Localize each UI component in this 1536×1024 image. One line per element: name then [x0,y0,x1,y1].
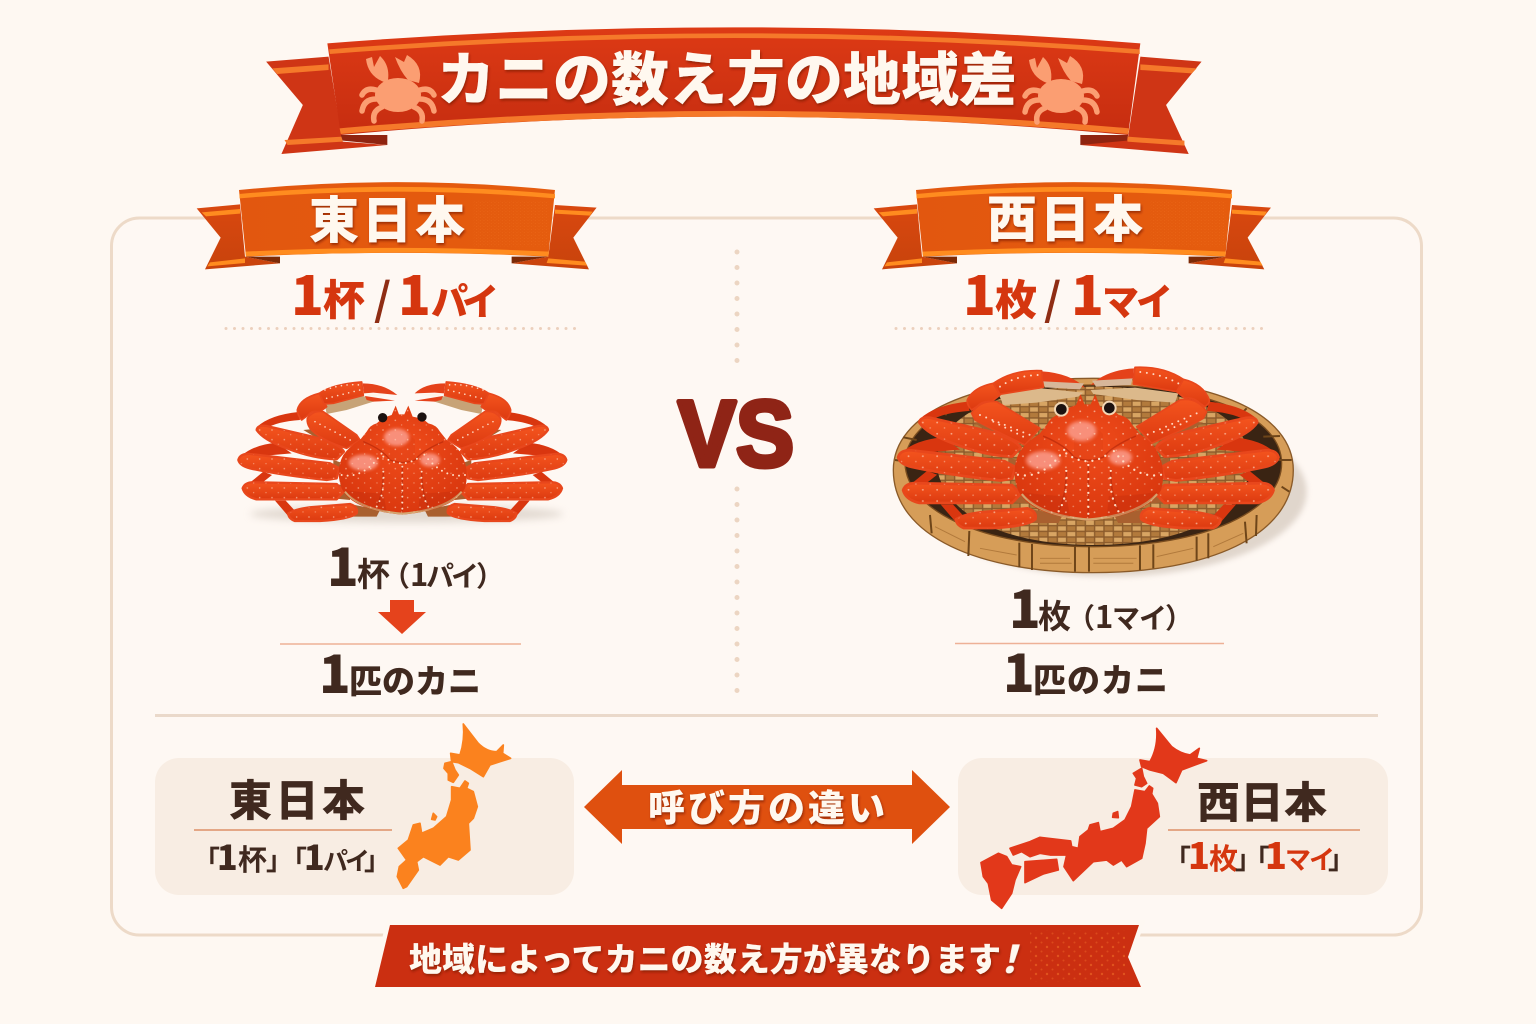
subtitle: east: イ [462,272,499,326]
eyes [378,412,427,422]
subtitle: east: 1 [291,252,324,331]
label: 1 hai: （ [382,555,410,595]
wording: 「 [1164,838,1191,877]
label: one crab: カ [415,655,448,703]
subtitle: west: 1 [1071,252,1104,331]
wording: 「 [1243,838,1270,877]
main panel frame [112,218,1422,935]
label: 1 mai: 枚 [1038,590,1071,638]
crab: east [238,382,566,523]
subtitle: east: 1 [398,252,431,331]
label: one crab: ニ [1135,654,1168,702]
wording: 」 [266,839,293,878]
ribbon: east [197,181,597,269]
wording: 1 [217,831,238,880]
wording: 「 [193,839,220,878]
VS mark: VS [678,381,794,486]
label: 1 mai: イ [1139,597,1167,637]
map: east [397,724,511,888]
banner text: 地域によってカニの数え方が異なります [409,933,1001,981]
title text: カニの数え方の地域差 [437,33,1017,117]
subtitle: west: 枚 [995,267,1037,328]
subtitle: west: イ [1136,272,1173,326]
arrow label: 呼び方の違い [648,778,885,832]
double arrow: difference in naming [584,770,950,844]
heading: west: 西日本 [987,180,1143,252]
claw right [415,382,511,448]
heading: east: 東日本 [309,181,465,253]
wording: 「 [280,839,307,878]
subtitle: east: パ [431,272,468,326]
basket [893,378,1293,573]
label: one crab: 匹 [349,655,382,703]
wording: 」 [1328,838,1355,877]
panel: west summary [958,728,1388,908]
ribbon: west [874,180,1271,269]
label: 1 hai: イ [451,555,479,595]
exclamation: ！ [987,930,1039,985]
wording: 」 [364,839,391,878]
subtitle: west: / [1044,264,1061,328]
arrow down [378,600,426,634]
caption: east [280,526,521,708]
label: one crab: 1 [319,633,351,708]
label: 1 mai: 1 [1095,592,1113,637]
wording: マ [1285,840,1311,877]
claw left [297,382,397,448]
map: west [981,728,1207,908]
label: 1 mai: マ [1112,597,1140,637]
wording: パ [323,842,348,878]
wording: イ [1309,840,1335,877]
subtitle: east: / [374,264,391,328]
bottom banner [375,925,1141,987]
caption: west [955,568,1224,707]
wording: 1 [1188,828,1210,880]
subtitle: west: 1 [963,252,996,331]
label: 1 mai: 1 [1009,568,1041,643]
subtitle: west: マ [1102,272,1139,326]
wording: 1 [304,831,325,880]
heading: 東日本 [229,767,365,829]
label: one crab: 匹 [1033,654,1066,702]
wording: 1 [1265,828,1287,880]
icon: crab left [362,55,434,121]
heading: 西日本 [1197,769,1327,831]
title ribbon [266,27,1202,154]
label: one crab: 1 [1003,632,1035,707]
wording: 杯 [238,837,267,879]
label: 1 hai: パ [426,555,454,595]
label: 1 hai: 1 [410,550,428,595]
panel: east summary [155,724,574,895]
label: one crab: の [1067,654,1100,702]
icon: crab right [1025,56,1097,122]
wording: 」 [1235,838,1262,877]
label: one crab: カ [1101,654,1134,702]
label: 1 mai: （ [1067,597,1095,637]
crab [898,367,1279,528]
wording: イ [345,842,370,878]
label: one crab: ニ [448,655,481,703]
label: one crab: の [382,655,415,703]
label: 1 hai: 1 [327,526,359,601]
subtitle: east: 杯 [323,267,365,328]
label: 1 hai: 杯 [357,548,390,596]
wording: 枚 [1209,836,1238,878]
label: 1 hai: ） [476,555,504,595]
label: 1 mai: ） [1165,597,1193,637]
crab on basket: west [893,367,1307,577]
